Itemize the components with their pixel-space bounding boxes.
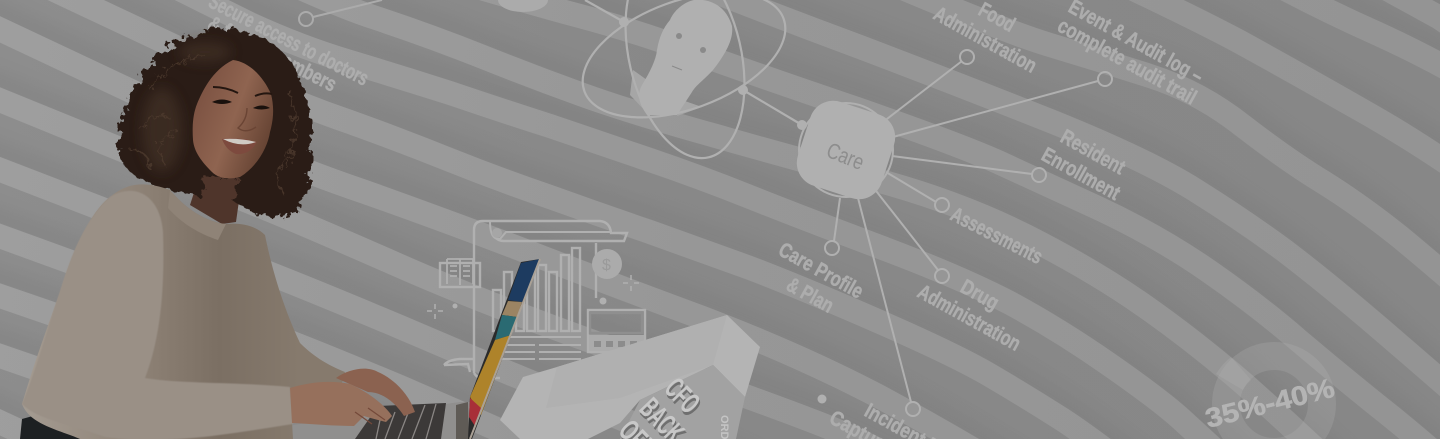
laptop bbox=[258, 259, 540, 439]
small filled dot bbox=[818, 394, 826, 404]
connector lines and nodes bbox=[799, 50, 1112, 416]
inner fold bbox=[546, 315, 727, 408]
scroll outline bbox=[444, 221, 627, 378]
sweater collar bbox=[168, 190, 226, 240]
label: resident enrollment: Enrollment bbox=[1038, 143, 1124, 205]
label: incident capture bbox=[826, 399, 982, 439]
care rounded square: Care bbox=[823, 137, 868, 175]
chevron face bbox=[500, 315, 760, 439]
label: drug administration bbox=[914, 275, 1024, 356]
label: resident enrollment: Resident bbox=[1057, 125, 1129, 179]
label: event and audit log: complete audit trail bbox=[1054, 14, 1200, 110]
face bbox=[193, 60, 273, 178]
label: food administration bbox=[930, 0, 1040, 78]
care rounded square bbox=[791, 95, 901, 205]
hair bbox=[118, 29, 311, 217]
label: family members: & family members bbox=[204, 12, 340, 96]
atom diagram with head bbox=[498, 0, 802, 170]
icon: calculator bbox=[588, 310, 645, 352]
icon: open book bbox=[440, 259, 480, 287]
keyboard bbox=[355, 403, 446, 439]
sparkles and dots bbox=[427, 275, 639, 319]
label: drug administration: Drug bbox=[957, 275, 1003, 315]
financial scroll illustration bbox=[427, 221, 645, 378]
orbit nodes bbox=[619, 17, 748, 95]
care hub network bbox=[775, 0, 1207, 439]
label: assessments: Assessments bbox=[947, 203, 1046, 269]
top-left node with access label bbox=[204, 0, 382, 96]
neck bbox=[190, 165, 243, 224]
eyes and brows bbox=[213, 87, 272, 96]
laptop screen bbox=[468, 259, 540, 439]
trousers bbox=[20, 414, 105, 439]
sleeve bbox=[22, 191, 293, 439]
small clipped blob at top bbox=[498, 0, 548, 12]
nose bbox=[238, 108, 256, 131]
label: resident enrollment bbox=[1038, 125, 1129, 205]
sweater bbox=[22, 184, 345, 439]
label: care profile and plan: & Plan bbox=[783, 273, 837, 318]
woman at laptop bbox=[20, 29, 415, 439]
shadowed heading text bbox=[612, 372, 707, 439]
label: food administration: Administration bbox=[930, 2, 1040, 78]
icon: coin bbox=[592, 249, 622, 279]
donut chart with 35%-40% bbox=[1202, 356, 1338, 439]
label: drug administration: Administration bbox=[914, 280, 1024, 356]
hair strands bbox=[130, 55, 295, 195]
hinge bbox=[456, 402, 469, 439]
orbit rings bbox=[566, 0, 802, 170]
head silhouette bbox=[630, 0, 732, 116]
smile bbox=[222, 138, 257, 154]
icon: coin: $ bbox=[602, 257, 611, 274]
laptop base bbox=[258, 402, 470, 439]
hub node bbox=[797, 120, 807, 130]
label: care profile and plan: Care Profile bbox=[775, 238, 867, 303]
shadowed heading text: CFO bbox=[658, 372, 706, 420]
chair shadow behind arm bbox=[228, 352, 258, 388]
shaded inner panel bbox=[620, 365, 745, 439]
percent label: 35%-40% bbox=[1202, 373, 1338, 434]
bar chart bbox=[493, 248, 581, 359]
hair highlights bbox=[142, 42, 231, 172]
3D chevron box with CFO back office bbox=[500, 315, 760, 439]
hands bbox=[290, 369, 415, 426]
